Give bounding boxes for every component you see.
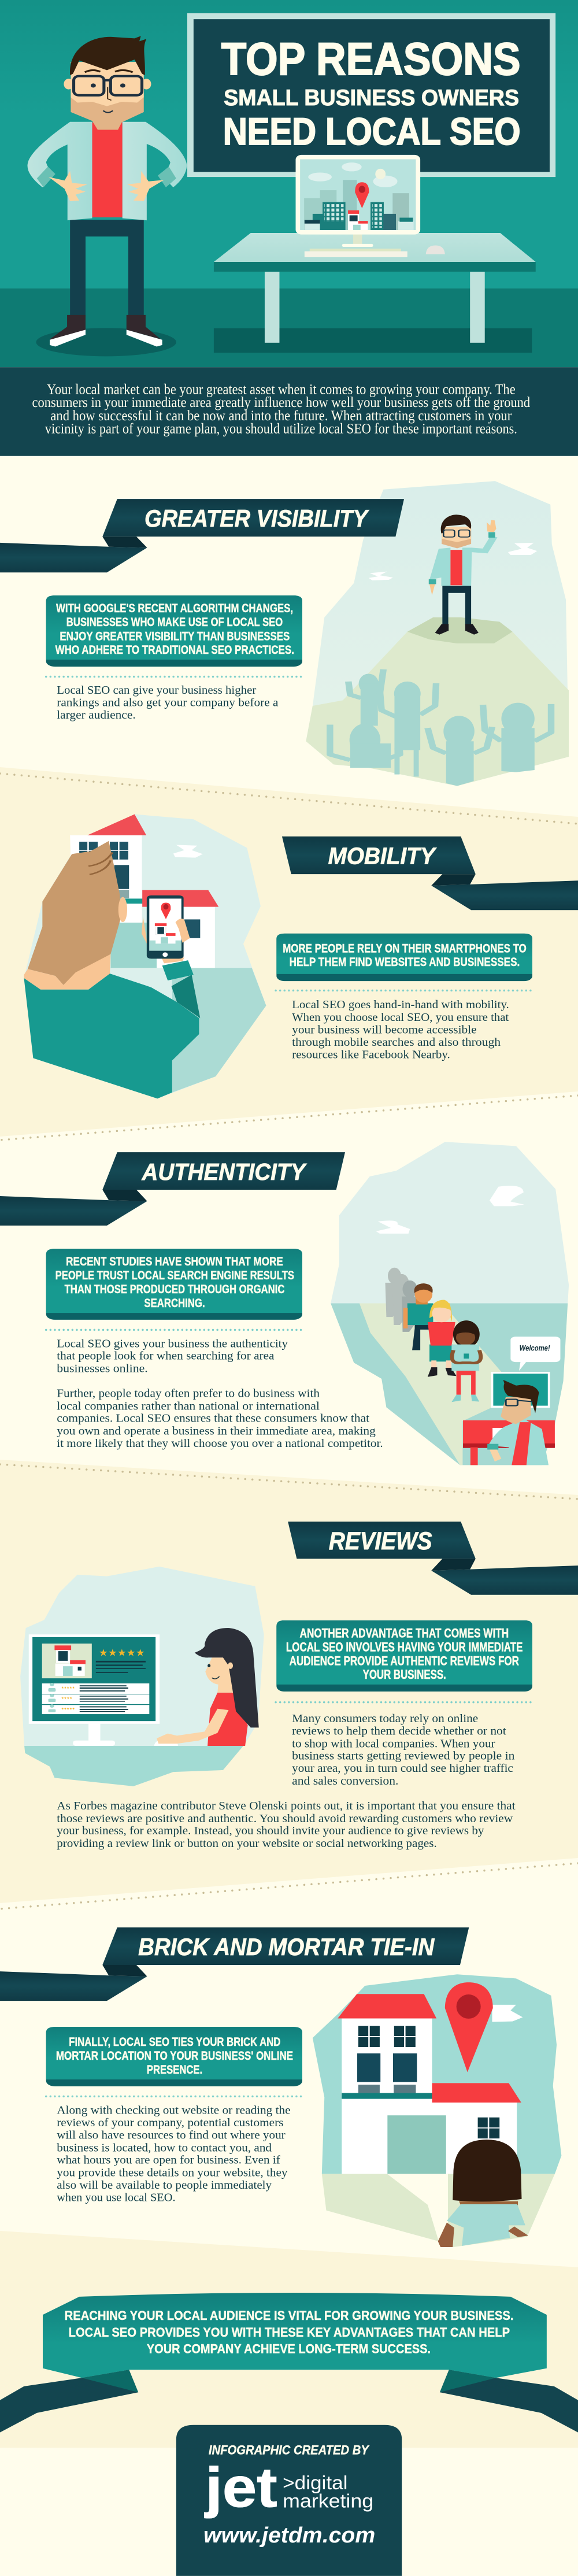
callout box: FINALLY, LOCAL SEO TIES YOUR BRICK AND bbox=[69, 2035, 280, 2048]
body text: resources like Facebook Nearby. bbox=[292, 1048, 450, 1061]
callout box bbox=[276, 934, 532, 981]
body text: Local SEO can give your business higher bbox=[57, 683, 256, 696]
illustration: customers queue at a shop bbox=[331, 1142, 569, 1465]
body text: when you use local SEO. bbox=[57, 2191, 176, 2204]
credit panel: marketing bbox=[283, 2490, 373, 2511]
body text: Along with checking out website or reading the bbox=[57, 2104, 291, 2116]
body text: you own and operate a business in their immediate area, making bbox=[57, 1424, 376, 1437]
illustration: person viewing map on phone bbox=[24, 815, 266, 1098]
callout box bbox=[46, 2027, 302, 2086]
callout box: SEARCHING. bbox=[144, 1297, 205, 1310]
body text: rankings and also get your company before a bbox=[57, 696, 279, 709]
callout box: BUSINESSES WHO MAKE USE OF LOCAL SEO bbox=[66, 616, 283, 629]
section: mobility bbox=[24, 815, 578, 1098]
body text: local companies rather than national or international bbox=[57, 1399, 320, 1412]
body text: businesses online. bbox=[57, 1362, 148, 1375]
callout box bbox=[46, 1249, 302, 1320]
body text: reviews to help them decide whether or not bbox=[292, 1724, 506, 1737]
section: greater visibility: WITH GOOGLE'S RECENT ALGORITHM CHANGES, bbox=[56, 602, 293, 615]
body text: Further, people today often prefer to do business with bbox=[57, 1387, 320, 1400]
banner: reviews bbox=[288, 1522, 578, 1595]
banner: brick and mortar tie-in bbox=[0, 1927, 469, 2001]
banner: mobility: MOBILITY bbox=[328, 843, 437, 869]
body text bbox=[57, 1337, 383, 1449]
callout box: PRESENCE. bbox=[147, 2063, 202, 2076]
illustration: woman reading reviews on a computer bbox=[20, 1567, 264, 1786]
closing ribbon bbox=[0, 2293, 578, 2433]
body text bbox=[57, 1712, 516, 1850]
title board bbox=[187, 13, 555, 177]
body text: what hours you are open for business. Even if bbox=[57, 2153, 280, 2166]
computer with city and map pin bbox=[296, 155, 445, 257]
illustration: woman reading reviews on a computer: ★★★★ bbox=[61, 1696, 72, 1700]
illustration: customers queue at a shop: Welcome! bbox=[520, 1344, 550, 1353]
callout box: WHO ADHERE TO TRADITIONAL SEO PRACTICES. bbox=[55, 643, 294, 657]
body text: and sales conversion. bbox=[292, 1775, 398, 1787]
body text: larger audience. bbox=[57, 709, 136, 721]
callout box: MORTAR LOCATION TO YOUR BUSINESS' ONLINE bbox=[56, 2049, 293, 2063]
section: closing bbox=[0, 2293, 578, 2576]
body text: to shop with local companies. When your bbox=[292, 1737, 495, 1750]
hero section bbox=[0, 0, 578, 367]
illustration: woman reading reviews on a computer: ★★★★★ bbox=[61, 1707, 75, 1711]
callout box: RECENT STUDIES HAVE SHOWN THAT MORE bbox=[66, 1254, 283, 1268]
illustration: woman reading reviews on a computer: ★★★★★ bbox=[99, 1647, 145, 1659]
banner: authenticity: AUTHENTICITY bbox=[141, 1159, 307, 1185]
body text: reviews of your company, potential customers bbox=[57, 2116, 283, 2129]
section: reviews bbox=[20, 1522, 578, 1850]
body text: it more likely that they will choose you over a national competitor. bbox=[57, 1437, 383, 1449]
body text: companies. Local SEO ensures that these consumers know that bbox=[57, 1412, 369, 1424]
callout box: THAN THOSE PRODUCED THROUGH ORGANIC bbox=[65, 1282, 284, 1296]
banner: greater visibility bbox=[0, 499, 404, 572]
body text: your business will become accessible bbox=[292, 1023, 477, 1036]
illustration: shop building with map pin bbox=[313, 1974, 561, 2247]
body text: providing a review link or button on your website or social networking pages. bbox=[57, 1837, 437, 1850]
body text: Local SEO gives your business the authenticity bbox=[57, 1337, 288, 1350]
body text: you provide these details on your website, they bbox=[57, 2166, 288, 2179]
callout box: YOUR BUSINESS. bbox=[363, 1667, 446, 1682]
banner: mobility bbox=[282, 837, 578, 910]
body text bbox=[57, 2104, 291, 2204]
section: authenticity bbox=[0, 1142, 569, 1465]
callout box: PEOPLE TRUST LOCAL SEARCH ENGINE RESULTS bbox=[55, 1268, 294, 1282]
credit panel: jet bbox=[204, 2456, 277, 2519]
illustration: man on mountain with crowd bbox=[306, 481, 569, 786]
section: brick and mortar tie-in bbox=[0, 1927, 561, 2247]
body text: your area, you in turn could see higher traffic bbox=[292, 1762, 513, 1775]
body text: business starts getting reviewed by people in bbox=[292, 1749, 514, 1763]
banner: reviews: REVIEWS bbox=[329, 1527, 432, 1555]
credit panel: INFOGRAPHIC CREATED BY bbox=[209, 2442, 370, 2457]
body text: will also have resources to find out where your bbox=[57, 2129, 286, 2141]
callout box: ENJOY GREATER VISIBILITY THAN BUSINESSES bbox=[60, 630, 290, 643]
section: greater visibility bbox=[0, 481, 569, 786]
desk bbox=[214, 233, 536, 353]
credit panel bbox=[176, 2425, 402, 2576]
man character bbox=[28, 36, 187, 356]
body text: that people look for when searching for area bbox=[57, 1349, 275, 1362]
body text bbox=[292, 998, 509, 1061]
illustration: woman reading reviews on a computer: ★★★★★ bbox=[61, 1686, 75, 1690]
body text bbox=[57, 683, 279, 721]
callout box bbox=[46, 595, 302, 667]
intro text band bbox=[0, 367, 578, 456]
body text: business is located, how to contact you, and bbox=[57, 2141, 272, 2154]
body text: also will be available to people immediately bbox=[57, 2178, 272, 2192]
credit panel: www.jetdm.com bbox=[203, 2523, 375, 2547]
credit panel: >digital bbox=[283, 2472, 347, 2493]
callout box bbox=[276, 1620, 532, 1692]
body text: Many consumers today rely on online bbox=[292, 1712, 478, 1725]
banner: greater visibility: GREATER VISIBILITY bbox=[144, 505, 369, 532]
banner: authenticity bbox=[0, 1152, 345, 1226]
